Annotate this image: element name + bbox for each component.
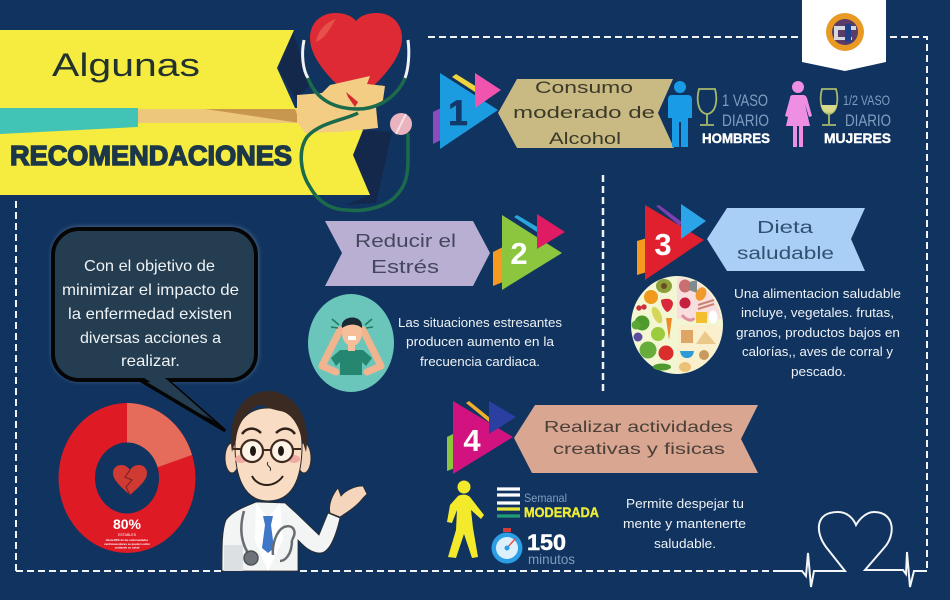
icon: healthy food plate <box>631 276 723 374</box>
women serving label: DIARIO <box>845 111 891 130</box>
doctor illustration <box>222 391 367 571</box>
bubble text: realizar. <box>121 353 180 370</box>
weekly frequency label <box>497 489 599 520</box>
section 3: body text: calorías,, aves de corral y <box>742 344 894 359</box>
icon: woman <box>785 81 812 147</box>
section 2: heading banner <box>325 221 490 286</box>
section 1: heading banner: Consumo <box>535 78 633 97</box>
bubble text: diversas acciones a <box>80 330 221 347</box>
duration label <box>527 530 575 567</box>
icon: stopwatch <box>492 528 522 564</box>
section 4: body text: mente y mantenerte <box>623 516 746 531</box>
donut label: ESTABLES <box>118 533 137 537</box>
section 3: body text: granos, productos bajos en <box>736 325 900 340</box>
bubble text: minimizar el impacto de <box>62 282 239 299</box>
duration label: 150 <box>527 530 566 555</box>
section 2: body text <box>398 315 562 369</box>
weekly frequency label: Semanal <box>524 491 567 505</box>
section 1: number marker: 1 <box>448 94 468 133</box>
bubble text <box>62 258 239 370</box>
section 1: heading banner: Alcohol <box>549 129 621 148</box>
section 3: number marker: 3 <box>654 227 672 262</box>
section 3: body text: Una alimentacion saludable <box>734 286 901 301</box>
section 3: body text: incluye, vegetales. frutas, <box>741 305 894 320</box>
title banner <box>0 30 392 205</box>
donut label: 80% <box>113 516 142 532</box>
section 1: heading banner: moderado de <box>513 103 655 122</box>
weekly frequency label: MODERADA <box>524 504 599 520</box>
men serving label: DIARIO <box>722 111 769 130</box>
section 4: body text: saludable. <box>654 536 716 551</box>
hand <box>330 486 367 517</box>
section 4: body text <box>623 496 746 551</box>
icon: heart outline with heartbeat line <box>775 512 927 587</box>
icon: half wine glass <box>821 89 837 125</box>
head <box>225 391 311 501</box>
icon: full wine glass <box>698 89 716 125</box>
section 2: heading banner: Reducir el <box>355 231 456 251</box>
title: Recomendaciones: RECOMENDACIONES <box>10 140 292 171</box>
section 4: heading banner: Realizar actividades <box>544 419 733 436</box>
section 2: body text: Las situaciones estresantes <box>398 315 562 330</box>
section 1: heading banner <box>498 78 674 148</box>
men serving label: 1 VASO <box>722 91 768 110</box>
donut label: cuidando su salud <box>115 546 140 550</box>
women serving label: MUJERES <box>824 130 891 146</box>
section 3: body text <box>734 286 901 379</box>
icon: man <box>668 81 692 147</box>
section 2: number marker: 2 <box>510 236 528 271</box>
section 2: heading banner: Estrés <box>371 257 439 277</box>
arm <box>0 108 300 134</box>
icon: heart with hand and stethoscope <box>297 13 412 210</box>
bubble text: la enfermedad existen <box>68 306 232 323</box>
donut label: cardiovasculares se pueden evitar <box>104 542 151 546</box>
icon: broken heart <box>113 465 147 495</box>
duration label: minutos <box>528 551 575 567</box>
coat <box>222 502 340 571</box>
section 2: body text: frecuencia cardiaca. <box>420 354 540 369</box>
women serving label: 1/2 VASO <box>843 92 890 108</box>
section 2: number marker <box>493 214 565 290</box>
speech bubble <box>53 228 257 430</box>
icon: stressed person <box>308 294 394 392</box>
donut label <box>104 516 151 550</box>
donut label: Hasta 80% de las enfermedades <box>106 538 149 542</box>
section 3: heading banner: Dieta <box>757 217 813 237</box>
women serving label <box>824 92 891 146</box>
section 4: body text: Permite despejar tu <box>626 496 744 511</box>
bubble text: Con el objetivo de <box>84 258 215 275</box>
men serving label: HOMBRES <box>702 130 770 146</box>
section 4: heading banner: creativas y fisicas <box>553 441 725 458</box>
men serving label <box>702 91 770 146</box>
title: Algunas: Algunas <box>52 47 200 83</box>
section 4: number marker: 4 <box>463 423 481 458</box>
icon: walking person <box>447 480 484 558</box>
section 3: heading banner: saludable <box>737 243 834 263</box>
section 4: number marker <box>447 401 516 474</box>
section 1: number marker <box>433 73 501 149</box>
section 3: number marker <box>637 204 706 280</box>
logo badge <box>802 0 886 71</box>
section 3: body text: pescado. <box>791 364 846 379</box>
section 4: heading banner <box>514 405 758 473</box>
donut chart: 80% <box>58 403 196 553</box>
section 2: body text: producen aumento en la <box>406 334 555 349</box>
section 3: heading banner <box>707 208 865 271</box>
